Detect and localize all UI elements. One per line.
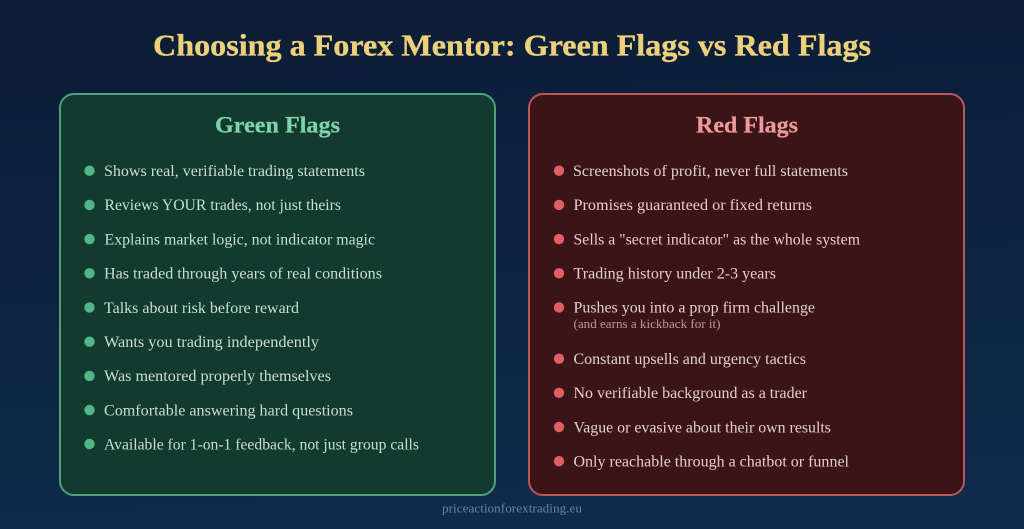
- title: Choosing a Forex Mentor: Green Flags vs Red Flags: [153, 28, 871, 62]
- item: screenshots: Screenshots of profit, never full statements: [573, 163, 848, 180]
- item: reviews your trades: Reviews YOUR trades, not just theirs: [104, 197, 341, 214]
- footer url: priceactionforextrading.eu: [442, 502, 583, 516]
- item: trading independently: Wants you trading independently: [104, 334, 319, 351]
- item: secret indicator: Sells a "secret indicator" as the whole system: [574, 231, 861, 248]
- item: hard questions: Comfortable answering hard questions: [104, 402, 353, 419]
- item: risk before reward: Talks about risk before reward: [104, 300, 299, 317]
- item: market logic: Explains market logic, not indicator magic: [104, 231, 375, 248]
- heading: green flags: Green Flags: [215, 112, 340, 138]
- item: prop firm challenge: [554, 300, 815, 331]
- item: years of conditions: Has traded through years of real conditions: [104, 266, 382, 283]
- item: chatbot or funnel: Only reachable through a chatbot or funnel: [574, 454, 850, 470]
- item: no background: No verifiable background as a trader: [574, 385, 808, 402]
- item: guaranteed returns: Promises guaranteed or fixed returns: [574, 197, 812, 214]
- heading: red flags: Red Flags: [696, 112, 798, 138]
- item: upsells: Constant upsells and urgency tactics: [574, 351, 806, 368]
- panel: green flags: [60, 94, 495, 495]
- item: mentored properly: Was mentored properly themselves: [104, 368, 331, 385]
- panel: red flags: [529, 94, 964, 495]
- item: verifiable statements: Shows real, verifiable trading statements: [104, 163, 365, 180]
- item: prop firm challenge: Pushes you into a prop firm challenge: [574, 300, 815, 317]
- item: prop firm challenge: (and earns a kickback for it): [574, 317, 720, 331]
- item: short trading history: Trading history under 2-3 years: [574, 266, 776, 283]
- item: one-on-one feedback: Available for 1-on-1 feedback, not just group calls: [104, 436, 419, 453]
- item: evasive results: Vague or evasive about their own results: [574, 419, 831, 436]
